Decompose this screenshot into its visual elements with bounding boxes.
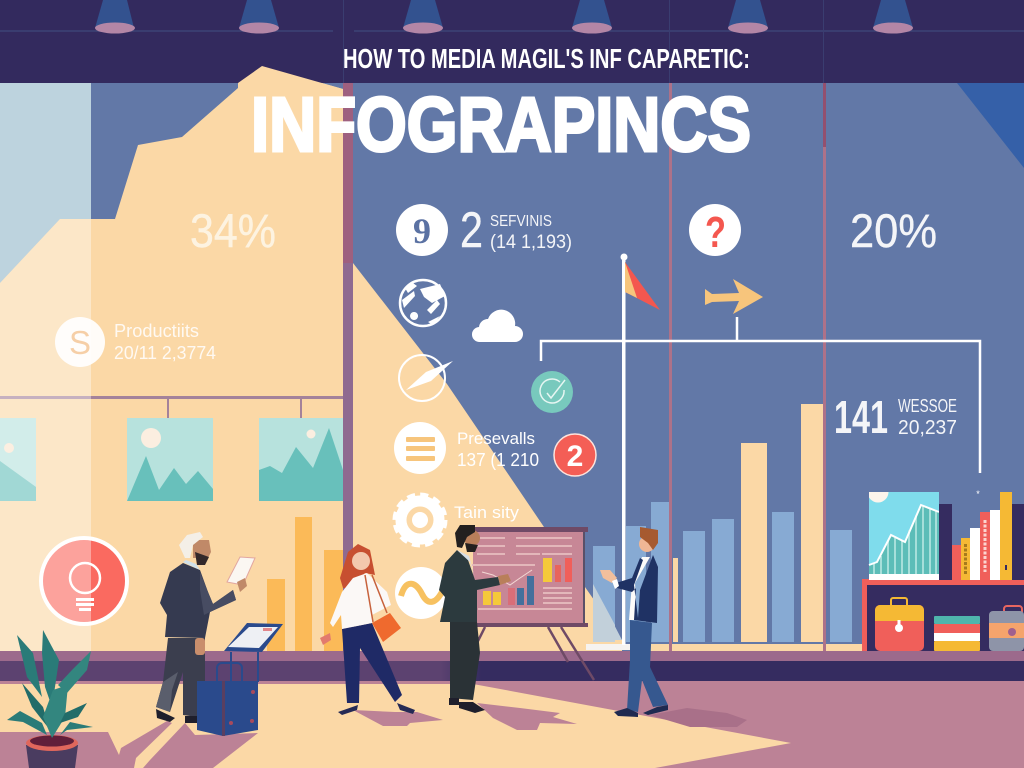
text: presevalls bbox=[457, 429, 539, 470]
icon: red number badge: 2 bbox=[567, 440, 583, 473]
bag: red and yellow bbox=[875, 598, 924, 651]
ceiling lamps bbox=[95, 0, 913, 34]
floor band bbox=[0, 651, 1024, 681]
icon: teal check badge bbox=[531, 371, 573, 413]
icon: light bulb bbox=[41, 538, 127, 624]
presentation board bbox=[472, 527, 594, 680]
light overlay on left wall bbox=[0, 219, 91, 652]
stacked folders bbox=[934, 616, 980, 651]
text: tain sity: Tain sity bbox=[454, 503, 520, 522]
floor bbox=[0, 681, 1024, 768]
stat: 2 services: SEFVINIS bbox=[490, 213, 552, 230]
person: man in blue suit bbox=[600, 527, 668, 717]
potted plant bbox=[7, 630, 93, 768]
icon: S badge bbox=[55, 317, 105, 367]
shelf with items bbox=[862, 482, 1024, 651]
stat: 141 wessoe: WESSOE bbox=[898, 396, 957, 416]
heading: main title: INFOGRAPINCS bbox=[251, 82, 751, 168]
framed picture left bbox=[0, 418, 36, 501]
text: presevalls: Presevalls bbox=[457, 429, 535, 448]
stat: 34%: 34% bbox=[190, 204, 276, 257]
small star: * bbox=[976, 489, 980, 499]
person: woman with bag bbox=[320, 544, 415, 715]
text: products bbox=[114, 321, 216, 363]
cream wall shape bbox=[0, 66, 622, 652]
stat: 141 wessoe: 20,237 bbox=[898, 417, 957, 439]
person: man presenting bbox=[439, 525, 511, 713]
icon: compass bbox=[399, 355, 453, 401]
bag: grey bbox=[989, 606, 1024, 651]
stat: 2 services bbox=[460, 202, 572, 258]
stat: 20%: 20% bbox=[850, 204, 937, 257]
floor shadows bbox=[0, 703, 747, 768]
framed picture centre bbox=[127, 418, 213, 501]
icon: S badge: S bbox=[69, 324, 91, 361]
icon: globe bbox=[400, 280, 446, 326]
icon: number 9 badge bbox=[396, 204, 448, 256]
person: man with tablet bbox=[156, 532, 255, 723]
icon: wave badge bbox=[395, 567, 447, 619]
stat: 141 wessoe bbox=[834, 391, 957, 443]
icon: red number badge bbox=[554, 434, 596, 476]
stat: 2 services: (14 1,193) bbox=[490, 232, 572, 253]
connector lines bbox=[541, 317, 980, 473]
cream peak over header bbox=[238, 66, 343, 90]
lectern with case bbox=[197, 623, 283, 736]
icon: cloud bbox=[472, 310, 523, 342]
icon: question badge: ? bbox=[705, 208, 726, 257]
text: products: Productiits bbox=[114, 321, 199, 341]
icon: number 9 badge: 9 bbox=[413, 211, 431, 251]
icon: menu badge bbox=[394, 422, 446, 474]
text: presevalls: 137 (1 210 bbox=[457, 450, 539, 470]
blue and cream bar chart bbox=[586, 404, 862, 651]
icon: arrow bbox=[705, 279, 763, 314]
stat: 2 services: 2 bbox=[460, 202, 483, 258]
gallery rail bbox=[0, 396, 343, 418]
icon: flag bbox=[620, 254, 660, 645]
icon: gear bbox=[395, 495, 445, 545]
yellow bar chart bbox=[267, 517, 343, 651]
text: products: 20/11 2,3774 bbox=[114, 343, 216, 363]
header band bbox=[0, 0, 1024, 83]
wall background bbox=[0, 83, 1024, 653]
picture with line chart bbox=[868, 492, 939, 580]
heading: subtitle: HOW TO MEDIA MAGIL'S INF CAPARETIC: bbox=[343, 43, 750, 74]
framed picture right bbox=[259, 418, 343, 501]
stat: 141 wessoe: 141 bbox=[834, 391, 888, 443]
icon: question badge bbox=[689, 204, 741, 257]
window pillars bbox=[343, 83, 826, 651]
books bbox=[939, 492, 1024, 580]
